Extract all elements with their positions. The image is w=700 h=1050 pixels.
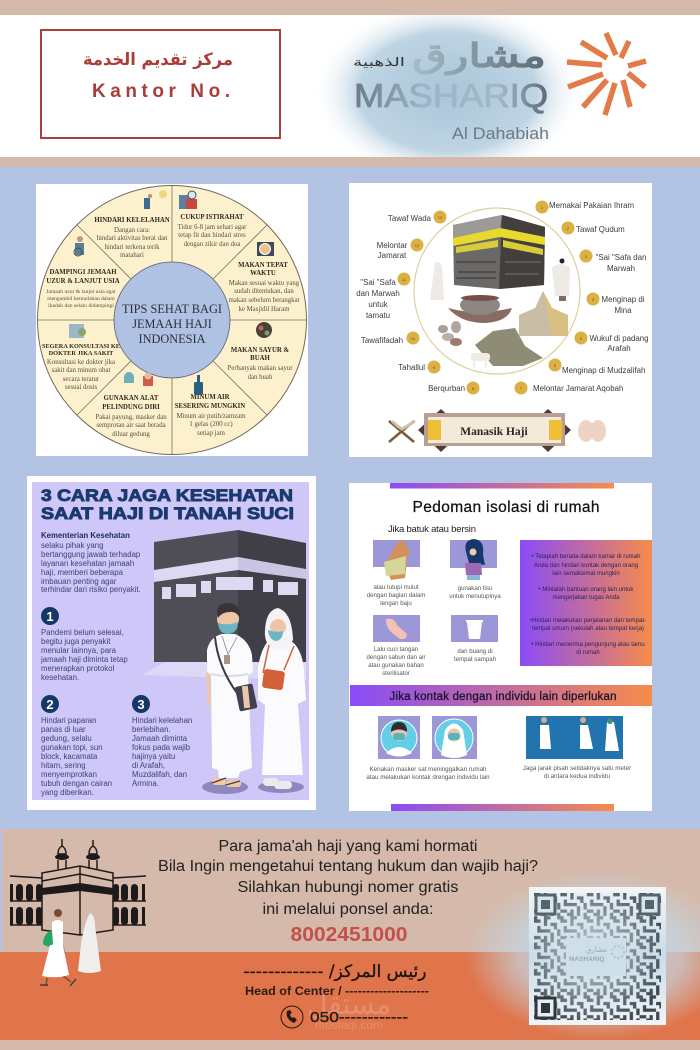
tip text blocks: WAKTU (250, 270, 276, 277)
contact banner (350, 685, 652, 706)
kaaba watercolor (453, 215, 545, 289)
tip text blocks: Jamaah uzur & lanjut usia agar (46, 289, 116, 295)
step 2: gunakan topi, sun (41, 743, 103, 752)
contact captions (366, 765, 631, 781)
step labels: Berqurban (428, 384, 465, 393)
step 3: Jamaah diminta (132, 734, 188, 743)
contact captions: Kenakan masker sat meninggalkan rumah (369, 766, 487, 773)
icon captions: gunakan tisu (458, 585, 492, 592)
tip text blocks: hindari terkena terik (104, 244, 160, 251)
numbered step markers (398, 200, 600, 394)
manasik haji banner: Manasik Haji (460, 426, 529, 438)
tip text blocks: diluar gedung (112, 431, 150, 438)
tip text blocks: DAMPINGI JEMAAH (49, 269, 117, 276)
step 2: menyemprotkan (41, 770, 97, 779)
pilgrim man illustration (202, 603, 258, 794)
step labels: Melontar (377, 241, 408, 250)
well, tent, stones, rocks (438, 291, 568, 368)
step 2: block, kacamata (41, 752, 98, 761)
center circle title: INDONESIA (139, 332, 206, 346)
contact text: Bila Ingin mengetahui tentang hukum dan wajib haji? (158, 858, 538, 875)
step 3: di Arafah, (132, 761, 165, 770)
icon: logo sun rays (567, 33, 646, 115)
gradient advice box: tempat umum (sekolah atau tempat kerja) (532, 626, 644, 632)
numbered step markers: 13 (438, 215, 443, 220)
center circle title: JEMAAH HAJI (132, 317, 212, 331)
tip text blocks: Konsultasi ke dokter jika (47, 359, 115, 366)
heading: SAAT HAJI DI TANAH SUCI (41, 504, 294, 523)
step 2: 2 (46, 697, 54, 712)
icon captions: atau gunakan bahan (368, 662, 424, 669)
numbered step markers: 11 (402, 277, 407, 282)
icon captions: lengan baju (380, 600, 412, 607)
service center box: Kantor No. (92, 81, 230, 102)
contact captions: Jaga jarak pisah setidaknya satu meter (523, 765, 631, 772)
pilgrim man (40, 909, 76, 986)
step 1: kesehatan. (41, 673, 79, 682)
heading (41, 486, 294, 523)
tip text blocks: hindari aktivitas berat dan (97, 235, 168, 242)
phone number: 050------------ (310, 1009, 408, 1026)
numbered step markers: 6 (554, 363, 557, 368)
step labels: Tawafifadah (361, 336, 403, 345)
contact text: Silahkan hubungi nomer gratis (238, 879, 459, 896)
numbered step markers: 8 (472, 386, 475, 391)
step 3: 3 (137, 697, 145, 712)
intro text: bertanggung jawab terhadap (41, 550, 141, 559)
icon captions: sterilisator (382, 670, 410, 677)
logo glow (329, 15, 567, 157)
step labels: Wukuf di padang (589, 334, 649, 343)
step 2: hitam, sering (41, 761, 86, 770)
pilgrim woman illustration (258, 608, 306, 793)
intro text: layanan kesehatan jamaah (41, 559, 134, 568)
numbered step markers: 2 (567, 226, 570, 231)
icon: phone (281, 1006, 303, 1028)
masked faces (378, 716, 477, 759)
intro text: selaku pihak yang (41, 541, 103, 550)
step 3: Muzdalifah, dan (132, 770, 187, 779)
step 2 (41, 695, 112, 797)
subheading cough: Jika batuk atau bersin (388, 524, 476, 535)
contact banner: Jika kontak dengan individu lain diperlukan (390, 691, 616, 703)
step 3: berlebihan. (132, 725, 171, 734)
heading: Pedoman isolasi di rumah (412, 499, 600, 516)
kaaba illustration (142, 530, 306, 680)
tip text blocks: secara teratur (63, 376, 100, 383)
numbered step markers: 10 (411, 336, 416, 341)
gradient advice box: di rumah (576, 650, 600, 656)
icon captions: dengan sabun dan air (367, 654, 425, 661)
tip text blocks: MAKAN SAYUR & (231, 347, 289, 354)
tip text blocks: Makan sesuai waktu yang (229, 280, 300, 287)
tip text blocks: 1 gelas (200 cc) (189, 421, 233, 428)
tip text blocks: matahari (120, 252, 144, 259)
gradient advice box: • Hindari menerima pengunjung atau tamu (531, 642, 645, 648)
step 1: menerapkan protokol (41, 664, 115, 673)
contact captions: atau melakukan kontak drengan individu lain (366, 774, 490, 781)
icon captions: dengan bagian dalam (367, 592, 425, 599)
step labels: Marwah (607, 264, 635, 273)
step labels (356, 201, 649, 393)
intro text: imbauan penting agar (41, 577, 117, 586)
logo: masharik: الذهبية (353, 55, 405, 69)
step 3: hajinya yaitu (132, 752, 175, 761)
distance illustration (526, 716, 623, 759)
step labels: Tawaf Wada (388, 214, 432, 223)
step labels: Menginap di Mudzalifah (562, 366, 645, 375)
tip text blocks: sakit dan minum obat (52, 367, 110, 374)
gradient advice box: Anda dan hindari kontak dengan orang (534, 563, 638, 569)
gradient advice box: mengerjakan tugas Anda (553, 595, 620, 601)
step labels: Jamarat (378, 251, 407, 260)
logo: masharik: Al Dahabiah (452, 124, 549, 143)
qr code: مشارق (586, 946, 607, 954)
tip text blocks: Pakai payung, masker dan (95, 414, 167, 421)
numbered step markers: 3 (585, 254, 588, 259)
qr code: MASHARIQ (569, 956, 604, 963)
step 1: begitu juga penyakit (41, 637, 111, 646)
icon captions: untuk menutupinya (449, 593, 501, 600)
tip text blocks: dan buah (248, 374, 273, 381)
tip text blocks: dengan zikir dan doa (184, 241, 240, 248)
header band (0, 0, 700, 184)
tip text blocks: UZUR & LANJUT USIA (46, 278, 120, 285)
step labels: Arafah (607, 344, 631, 353)
icon captions: dan buang di (457, 648, 493, 655)
numbered step markers: 12 (415, 243, 420, 248)
panel: home isolation (349, 483, 652, 811)
step labels: Tahallul (398, 363, 425, 372)
step labels: Mina (614, 306, 632, 315)
numbered step markers: 4 (592, 297, 595, 302)
tip text blocks: MAKAN TEPAT (238, 262, 288, 269)
tip text blocks: ke Masjidil Haram (239, 306, 290, 313)
step 3: fokus pada wajib (132, 743, 191, 752)
step 3: Armina. (132, 779, 159, 788)
panel: manasik haji (349, 183, 652, 457)
gradient advice box (520, 540, 652, 666)
tip text blocks: sesuai dosis (65, 384, 97, 391)
tip text blocks: HINDARI KELELAHAN (94, 217, 170, 224)
tip text blocks: ibadah dan selalu didampingi (48, 303, 114, 309)
tip text blocks: GUNAKAN ALAT (104, 395, 159, 402)
contact text: ini melalui ponsel anda: (262, 901, 434, 918)
step labels: Memakai Pakaian Ihram (549, 201, 635, 210)
tip text blocks: semprotan air saat berada (96, 422, 166, 429)
qr code (529, 887, 666, 1025)
head of center arabic: ------------- /رئيس المركز (244, 962, 426, 982)
tip text blocks: tetap fit dan hindari stres (178, 232, 246, 239)
logo: masharik: MASHARIQ (354, 77, 548, 114)
step 3 (132, 695, 192, 788)
watermark: mostaqi.com (315, 1018, 383, 1032)
gradient advice box: lain semaksimal mungkin (552, 571, 620, 577)
step 1: Pandemi belum selesai, (41, 628, 124, 637)
contact captions: di antara kedua individu (544, 773, 611, 780)
tip text blocks: PELINDUNG DIRI (102, 404, 160, 411)
numbered step markers: 9 (433, 365, 436, 370)
tip text blocks: makan sebelum berangkat (229, 297, 300, 304)
numbered step markers: 5 (580, 336, 583, 341)
tip text blocks: SEGERA KONSULTASI KE (42, 343, 120, 350)
tip icons (69, 190, 274, 395)
intro text: terhindar dari risiko penyakit. (41, 585, 141, 594)
step 1: jamaah haji diminta tetap (40, 655, 128, 664)
step labels: "Sai "Safa dan (596, 253, 646, 262)
head of center latin: Head of Center / -------------------- (245, 986, 429, 998)
tip text blocks: CUKUP ISTIRAHAT (180, 214, 244, 221)
pilgrim figures (430, 258, 570, 301)
footer band (0, 829, 700, 1050)
center circle title: TIPS SEHAT BAGI (122, 302, 222, 316)
watermark: مستقل (307, 987, 391, 1022)
step 3: Hindari kelelahan (132, 716, 192, 725)
intro text: haji, memberi beberapa (41, 568, 124, 577)
step labels: Menginap di (602, 295, 645, 304)
service center box (41, 30, 280, 138)
step labels: tamatu (366, 311, 390, 320)
step 2: yang diberikan. (41, 788, 94, 797)
icon boxes (373, 539, 498, 642)
tip text blocks: MINUM AIR (190, 394, 230, 401)
panel: health tips wheel (36, 184, 308, 456)
step 1: menular lainnya, para (41, 646, 117, 655)
step labels: "Sai "Safa (360, 278, 396, 287)
step labels: untuk (368, 300, 388, 309)
tip text blocks: DOKTER JIKA SAKIT (49, 350, 114, 357)
tip text blocks: Minum air putih/zamzam (176, 413, 246, 420)
icon captions: atau tutupi mulut (373, 584, 419, 591)
logo: masharik: مشارق (412, 36, 546, 75)
gradient advice box: • Tetaplah berada dalam kamar di rumah (532, 554, 640, 560)
panel: 3 ways health (27, 476, 316, 810)
toll-free number: 8002451000 (290, 924, 408, 946)
tip text blocks (42, 214, 300, 438)
tip text blocks: Tidur 6-8 jam sehari agar (178, 224, 247, 231)
tip text blocks: mengambil kemudahan dalam (47, 296, 115, 302)
step 1: 1 (46, 609, 54, 624)
manasik haji banner (418, 409, 571, 452)
step 2: Hindari paparan (41, 716, 96, 725)
gradient advice box: •Hindari melakukan perjalanan dan tempat- (530, 618, 646, 624)
intro text: Kementerian Kesehatan (41, 531, 130, 540)
step 2: tubuh dengan cairan (41, 779, 112, 788)
tip text blocks: BUAH (250, 355, 271, 362)
icon: praying hands (578, 420, 606, 442)
step labels: dan Marwah (356, 289, 400, 298)
numbered step markers: 7 (520, 386, 523, 391)
step 2: panas di luar (41, 725, 86, 734)
tip text blocks: SESERING MUNGKIN (175, 403, 245, 410)
step 1 (40, 607, 128, 682)
heading: 3 CARA JAGA KESEHATAN (41, 486, 293, 505)
contact text (158, 838, 538, 918)
step labels: Melontar Jamarat Aqobah (533, 384, 623, 393)
icon captions (367, 584, 501, 677)
center circle title (114, 262, 230, 378)
tip text blocks: sudah ditentukan, dan (234, 288, 294, 295)
service center box: مركز تقديم الخدمة (83, 50, 233, 70)
tip text blocks: Perbanyak makan sayur (228, 365, 293, 372)
step 2: gedung, selalu (41, 734, 92, 743)
kaaba line drawing (10, 839, 146, 935)
icon: quran stand (389, 421, 415, 442)
tip text blocks: setiap jam (197, 430, 226, 437)
icon captions: Lalu cuci tangan (374, 646, 418, 653)
pilgrim woman (78, 913, 101, 973)
intro text (41, 531, 141, 594)
icon captions: tempat sampah (454, 656, 496, 663)
tip text blocks: Dangan cara: (114, 227, 150, 234)
numbered step markers: 1 (541, 205, 544, 210)
logo: masharik (353, 36, 549, 143)
contact text: Para jama'ah haji yang kami hormati (218, 838, 478, 855)
step labels: Tawaf Qudum (576, 225, 625, 234)
gradient advice box: • Mintalah bantuan orang lain untuk (539, 587, 634, 593)
